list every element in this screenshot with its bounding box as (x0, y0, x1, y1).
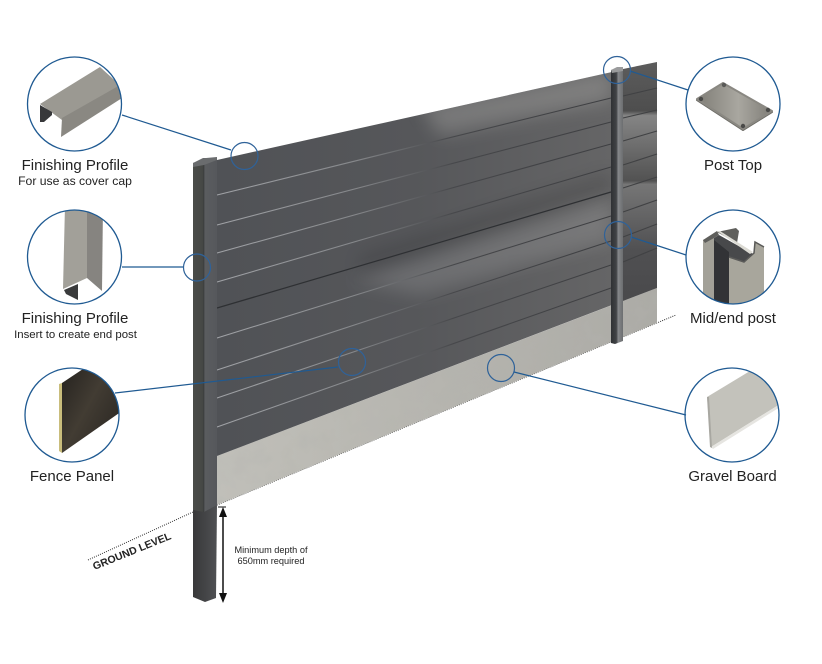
ground level label: GROUND LEVEL (91, 530, 174, 573)
icon: gravel board section (707, 371, 785, 449)
icon: post section (703, 228, 764, 310)
left end post (193, 157, 217, 512)
depth note: 650mm required (238, 556, 304, 566)
buried post section (193, 505, 217, 602)
fence panels (217, 62, 657, 456)
callout: finishing profile cap (18, 57, 258, 188)
fence illustration (88, 62, 676, 602)
callout: finishing profile cap: Finishing Profile (22, 157, 128, 174)
depth note (234, 545, 308, 566)
callout: finishing profile end post: Finishing Profile (22, 310, 128, 327)
callout: finishing profile end post: Insert to create end post (14, 329, 138, 341)
mid post (611, 67, 623, 344)
callout: mid/end post: Mid/end post (690, 310, 777, 327)
gravel board (217, 288, 657, 505)
depth arrow (218, 507, 227, 603)
ground level dotted line (88, 315, 676, 560)
callout: post top: Post Top (704, 157, 762, 174)
panel slat lines (217, 98, 611, 427)
callout: finishing profile end post (14, 205, 210, 341)
callout: post top (604, 56, 780, 174)
callout: gravel board: Gravel Board (688, 468, 777, 485)
icon: post top plate (697, 83, 772, 130)
icon: panel section (59, 370, 118, 453)
callout: fence panel: Fence Panel (30, 468, 114, 485)
icon: end profile (63, 205, 103, 300)
callout: gravel board (488, 354, 785, 485)
depth note: Minimum depth of (234, 545, 308, 555)
callout: mid/end post (604, 210, 780, 327)
callout: finishing profile cap: For use as cover cap (18, 174, 132, 188)
callout: fence panel (25, 343, 366, 485)
icon: cap profile (40, 67, 122, 137)
